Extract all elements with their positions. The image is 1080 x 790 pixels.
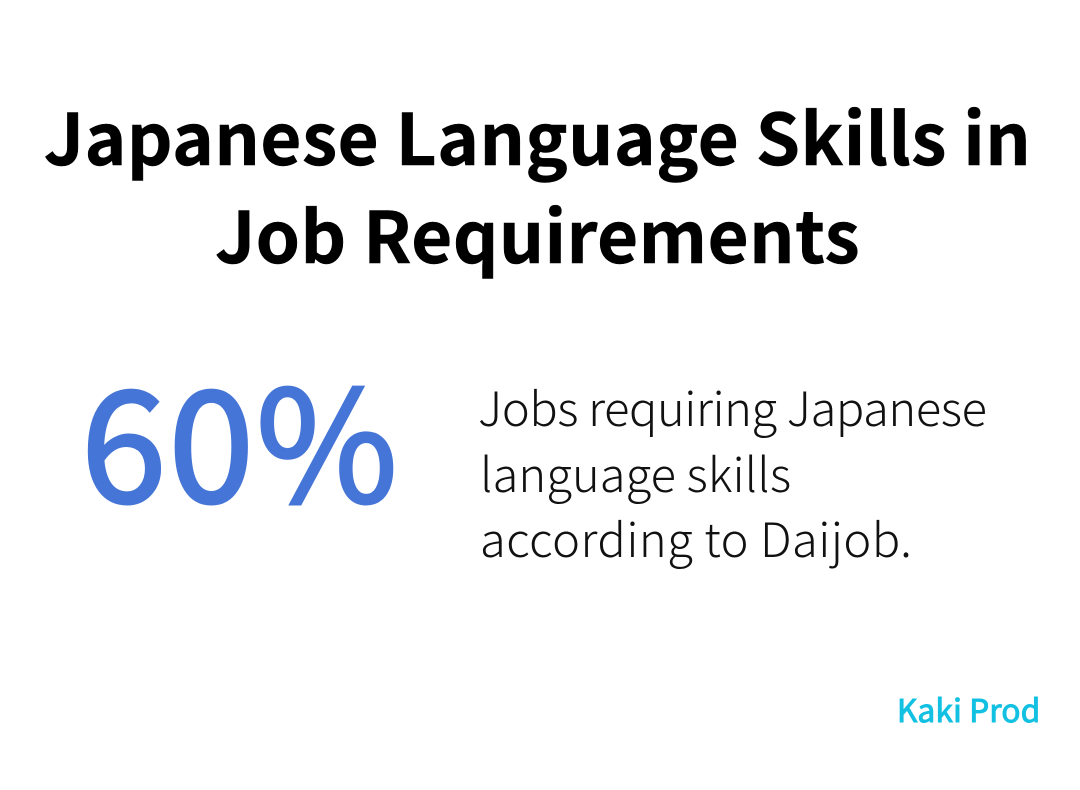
stat description: according to Daijob. — [480, 502, 912, 571]
stat description: Jobs requiring Japanese — [478, 371, 986, 440]
stat description — [478, 371, 986, 571]
stat description: language skills — [480, 436, 791, 506]
logo: Kaki Prod: Kaki Prod — [897, 686, 1040, 732]
title — [44, 84, 1031, 284]
big stat: 60%: 60% — [81, 324, 400, 547]
title: Japanese Language Skills in — [44, 84, 1031, 186]
title: Job Requirements — [215, 182, 860, 284]
